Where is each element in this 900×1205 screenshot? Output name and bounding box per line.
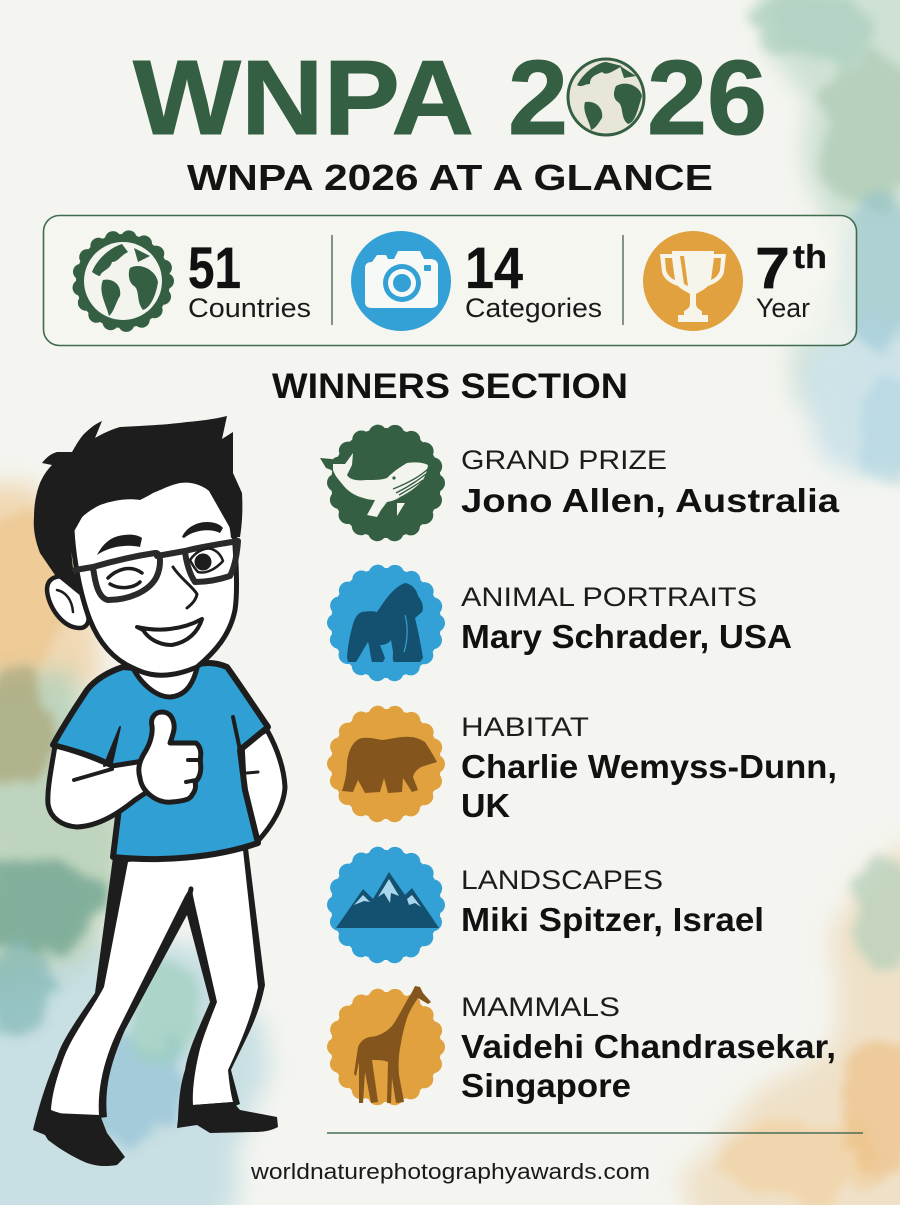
watercolor wash: left side	[0, 480, 261, 1205]
text: animal portraits: ANIMAL PORTRAITS	[461, 582, 757, 612]
watercolor wash: bottom right	[678, 840, 900, 1205]
left eyebrow	[97, 535, 142, 555]
text: habitat: UK	[461, 787, 510, 824]
stat: categories	[465, 236, 602, 323]
text: landscapes	[461, 865, 764, 938]
right sleeve crease	[233, 717, 240, 750]
face	[72, 470, 237, 675]
stat: categories: Categories	[465, 293, 602, 323]
text: landscapes: Miki Spitzer, Israel	[461, 901, 764, 938]
stat: year	[755, 236, 827, 323]
hair	[34, 416, 242, 597]
text: habitat: Charlie Wemyss-Dunn,	[461, 748, 837, 785]
stat: year: Year	[756, 293, 810, 323]
winner: grand prize	[320, 428, 840, 538]
subtitle: WNPA 2026 AT A GLANCE	[187, 157, 713, 198]
ear	[47, 576, 89, 628]
title: 2	[508, 39, 568, 157]
text: mammals: Singapore	[461, 1067, 631, 1104]
winner: habitat	[331, 709, 837, 824]
text: mammals: MAMMALS	[461, 992, 620, 1022]
icon: countries globe badge	[76, 234, 170, 328]
left arm	[48, 746, 150, 827]
panel: stats	[44, 216, 856, 346]
mouth	[137, 619, 202, 645]
hand	[139, 712, 201, 802]
right arm	[242, 730, 285, 842]
text: mammals: Vaidehi Chandrasekar,	[461, 1028, 836, 1065]
stat: countries	[188, 236, 311, 323]
left shoe	[33, 1113, 125, 1166]
character: thumbs-up man	[33, 416, 285, 1166]
watercolor wash: top right	[755, 0, 900, 480]
stat: countries: Countries	[188, 293, 311, 323]
text: landscapes: LANDSCAPES	[461, 865, 663, 895]
heading: winners section: WINNERS SECTION	[272, 367, 628, 406]
icon: mountains badge	[331, 850, 441, 960]
icon: title globe	[568, 59, 644, 135]
winner: animal portraits	[331, 568, 792, 678]
winner: mammals	[331, 986, 836, 1104]
text: animal portraits	[461, 582, 792, 655]
stat: countries: 51	[188, 236, 241, 301]
glasses	[75, 541, 238, 600]
title	[133, 39, 767, 157]
winner: landscapes	[331, 850, 764, 960]
icon: bear badge	[331, 709, 441, 819]
icon: camera	[351, 231, 451, 331]
wink eye	[108, 569, 142, 588]
neck	[133, 668, 197, 697]
shirt	[53, 663, 268, 859]
right eyebrow	[182, 522, 223, 538]
left sleeve crease	[104, 727, 120, 766]
right eye	[190, 549, 223, 573]
text: animal portraits: Mary Schrader, USA	[461, 618, 792, 655]
text: habitat: HABITAT	[461, 712, 589, 742]
nose	[173, 567, 197, 608]
right shoe	[177, 1100, 278, 1133]
icon: trophy	[643, 231, 743, 331]
text: mammals	[461, 992, 836, 1104]
title: 26	[647, 39, 767, 157]
stat: year: th	[793, 238, 827, 275]
text: grand prize: GRAND PRIZE	[461, 445, 667, 475]
text: grand prize	[461, 445, 840, 519]
footer url: worldnaturephotographyawards.com	[250, 1159, 650, 1184]
stat: categories: 14	[465, 236, 523, 301]
icon: gorilla badge	[331, 568, 441, 678]
icon: giraffe badge	[331, 986, 441, 1103]
legs	[33, 848, 265, 1130]
text: grand prize: Jono Allen, Australia	[461, 482, 840, 519]
text: habitat	[461, 712, 837, 824]
stat: year: 7	[755, 236, 790, 301]
icon: whale badge	[320, 428, 441, 538]
title: WNPA	[133, 39, 474, 157]
